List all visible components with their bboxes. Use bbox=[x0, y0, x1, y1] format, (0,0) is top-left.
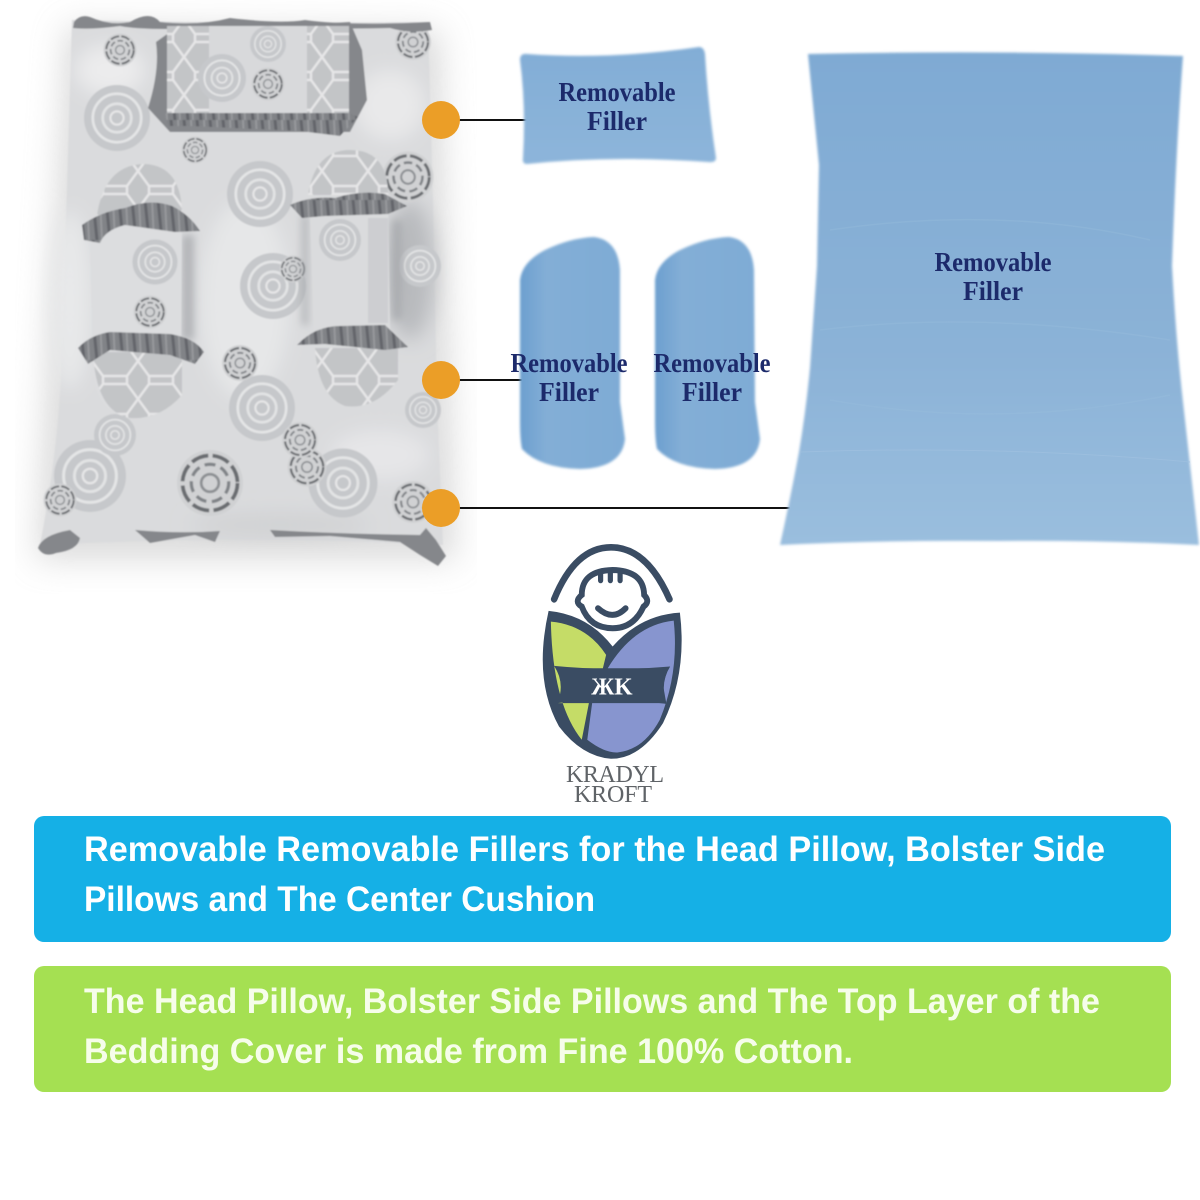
label: right bolster filler bbox=[654, 348, 771, 407]
right bolster bbox=[290, 150, 408, 406]
logo monogram: ЖK bbox=[591, 674, 633, 701]
mattress body bbox=[40, 20, 443, 545]
banner: cotton: Bedding Cover is made from Fine 100% Cotton. bbox=[84, 1032, 853, 1071]
product photo: bedding set bbox=[36, 16, 456, 566]
label: center cushion filler bbox=[934, 247, 1052, 306]
label: head pillow filler bbox=[558, 77, 676, 136]
label: head pillow filler: Removable bbox=[558, 77, 676, 107]
banner: cotton bbox=[34, 966, 1171, 1092]
mottled mattress shading bbox=[50, 45, 434, 535]
banner: cotton: The Head Pillow, Bolster Side Pillows and The Top Layer of the bbox=[84, 982, 1100, 1021]
label: center cushion filler: Removable bbox=[934, 247, 1052, 277]
mattress floral print bbox=[44, 24, 441, 523]
center cushion filler bbox=[780, 52, 1199, 545]
label: center cushion filler: Filler bbox=[963, 276, 1023, 306]
right bolster filler bbox=[655, 237, 760, 469]
head pillow filler bbox=[520, 47, 716, 164]
logo baby face bbox=[578, 570, 647, 628]
mattress ruffles bbox=[38, 16, 446, 566]
marker: head pillow bbox=[422, 101, 460, 139]
left bolster bbox=[78, 164, 204, 418]
logo band bbox=[554, 666, 670, 704]
label: left bolster filler: Removable bbox=[510, 348, 628, 378]
marker: center cushion bbox=[422, 489, 460, 527]
shadows beneath bolsters bbox=[182, 215, 402, 340]
left bolster filler bbox=[520, 237, 625, 469]
label: right bolster filler: Removable bbox=[654, 348, 771, 378]
logo wordmark bbox=[566, 762, 664, 808]
label: right bolster filler: Filler bbox=[682, 377, 742, 407]
label: head pillow filler: Filler bbox=[587, 106, 647, 136]
label: left bolster filler bbox=[510, 348, 628, 407]
logo swaddle bbox=[543, 611, 682, 759]
banner: removable fillers: Pillows and The Center Cushion bbox=[84, 880, 595, 919]
banner: removable fillers: Removable Removable Fillers for the Head Pillow, Bolster Side bbox=[84, 830, 1105, 869]
mattress shadow bbox=[36, 26, 456, 560]
logo: Kradyl Kroft bbox=[543, 547, 682, 759]
marker: bolsters bbox=[422, 361, 460, 399]
banner: removable fillers bbox=[34, 816, 1171, 942]
label: left bolster filler: Filler bbox=[539, 377, 599, 407]
logo arc bbox=[554, 547, 670, 599]
connector lines bbox=[455, 120, 790, 508]
logo wordmark: KROFT bbox=[574, 782, 652, 808]
head pillow bbox=[148, 22, 367, 136]
logo wordmark: KRADYL bbox=[566, 762, 664, 788]
